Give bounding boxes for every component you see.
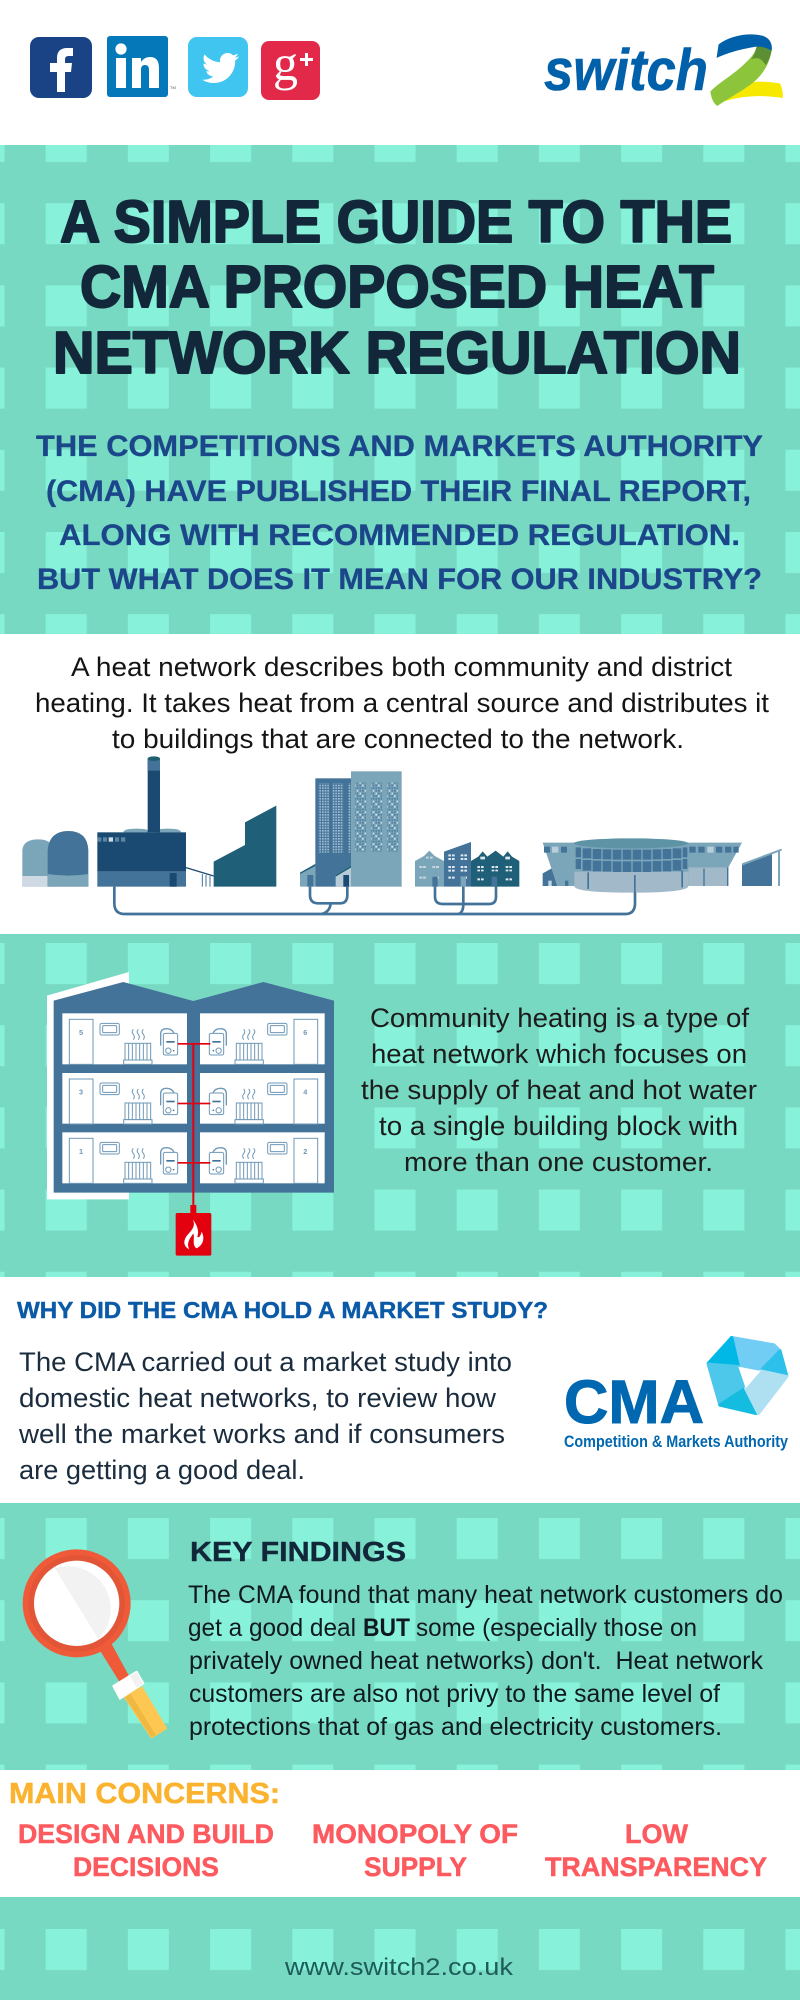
concern: low transparency: [545, 1819, 767, 1882]
text: findings paragraph: The CMA found that many heat network customers do: [188, 1581, 783, 1609]
pipe network: [114, 875, 635, 914]
icon: magnifying glass: [23, 1549, 166, 1737]
icon: google plus: g: [273, 35, 298, 91]
red heating pipes: [178, 1043, 210, 1214]
footer url: www.switch2.co.uk: [284, 1954, 514, 1981]
subtitle: BUT WHAT DOES IT MEAN FOR OUR INDUSTRY?: [37, 563, 762, 596]
panel: main concerns: [0, 1770, 800, 1897]
icon: facebook: [30, 37, 92, 98]
text: heat network description: to buildings that are connected to the network.: [112, 724, 684, 754]
panel: key findings: [0, 1503, 800, 1770]
energy centre with chimney: [97, 756, 276, 887]
illustration: apartment block: [47, 972, 334, 1256]
subtitle: THE COMPETITIONS AND MARKETS AUTHORITY: [36, 430, 763, 463]
icon: boiler flame: [176, 1213, 211, 1256]
small shed: [742, 849, 782, 886]
panel: market study: [0, 1277, 800, 1503]
panel: footer: [0, 1897, 800, 2000]
illustration: apartment block: 4: [303, 1088, 308, 1097]
logo: switch2: [544, 34, 783, 106]
concern: design and build decisions: DESIGN AND BUILD: [18, 1819, 274, 1849]
subtitle: (CMA) HAVE PUBLISHED THEIR FINAL REPORT,: [46, 475, 751, 508]
text: market study explanation: [18, 1347, 512, 1485]
logo: CMA: CMA: [564, 1368, 704, 1436]
icon: google plus: [261, 35, 320, 100]
illustration: apartment block: 5: [79, 1028, 83, 1037]
text: market study explanation: domestic heat networks, to review how: [19, 1383, 497, 1413]
tower blocks: [300, 771, 402, 887]
concern: monopoly of supply: MONOPOLY OF: [312, 1819, 518, 1849]
logo: CMA: [564, 1338, 788, 1451]
illustration: district heating skyline: [22, 756, 782, 914]
concern: low transparency: LOW: [625, 1819, 689, 1849]
panel: title banner: [0, 145, 800, 634]
concern: monopoly of supply: SUPPLY: [364, 1852, 467, 1882]
storage tanks: [22, 831, 88, 887]
text: findings paragraph: customers are also not privy to the same level of: [189, 1680, 720, 1708]
text: community heating description: the supply of heat and hot water: [361, 1075, 757, 1105]
text: heat network description: [35, 652, 770, 754]
heading: key findings: KEY FINDINGS: [190, 1536, 406, 1567]
panel: community heating: [0, 934, 800, 1277]
illustration: apartment block: 2: [303, 1147, 307, 1156]
text: heat network description: heating. It takes heat from a central source and distributes it: [35, 688, 770, 718]
text: community heating description: Community heating is a type of: [370, 1003, 750, 1033]
title: A SIMPLE GUIDE TO THE: [60, 189, 732, 255]
title: NETWORK REGULATION: [53, 320, 741, 386]
concern: design and build decisions: [18, 1819, 274, 1882]
icon: linkedin: TM: [170, 85, 176, 90]
terraced houses: [415, 842, 519, 887]
civic building: [543, 838, 742, 893]
text: findings paragraph: get a good deal: [188, 1614, 356, 1642]
title: [53, 189, 741, 386]
text: community heating description: to a single building block with: [379, 1111, 738, 1141]
illustration: apartment block: 3: [79, 1088, 83, 1097]
text: market study explanation: The CMA carried out a market study into: [19, 1347, 512, 1377]
text: market study explanation: well the market works and if consumers: [18, 1419, 505, 1449]
text: community heating description: heat network which focuses on: [371, 1039, 747, 1069]
heading: main concerns: MAIN CONCERNS:: [9, 1778, 280, 1810]
text: findings paragraph: protections that of gas and electricity customers.: [189, 1713, 722, 1741]
text: findings paragraph: some (especially those on: [416, 1614, 697, 1642]
text: heat network description: A heat network describes both community and district: [71, 652, 733, 682]
text: findings paragraph: BUT: [363, 1614, 410, 1642]
illustration: apartment block: 6: [303, 1028, 307, 1037]
icon: linkedin: [107, 36, 176, 97]
heading: why market study: WHY DID THE CMA HOLD A MARKET STUDY?: [17, 1297, 548, 1323]
text: findings paragraph: [188, 1581, 783, 1741]
concern: monopoly of supply: [312, 1819, 518, 1882]
text: community heating description: more than one customer.: [404, 1147, 713, 1177]
title: CMA PROPOSED HEAT: [80, 254, 714, 320]
concern: low transparency: TRANSPARENCY: [545, 1852, 767, 1882]
illustration: apartment block: 1: [79, 1147, 83, 1156]
text: market study explanation: are getting a good deal.: [19, 1455, 305, 1485]
subtitle: ALONG WITH RECOMMENDED REGULATION.: [59, 519, 740, 552]
icon: twitter: [188, 37, 248, 97]
subtitle: [36, 430, 763, 596]
text: community heating description: [361, 1003, 757, 1177]
panel: header: [0, 0, 800, 145]
panel: heat network definition: [0, 634, 800, 934]
text: findings paragraph: privately owned heat networks) don't. Heat network: [189, 1647, 763, 1675]
logo: switch2: switch: [544, 38, 708, 103]
concern: design and build decisions: DECISIONS: [73, 1852, 219, 1882]
